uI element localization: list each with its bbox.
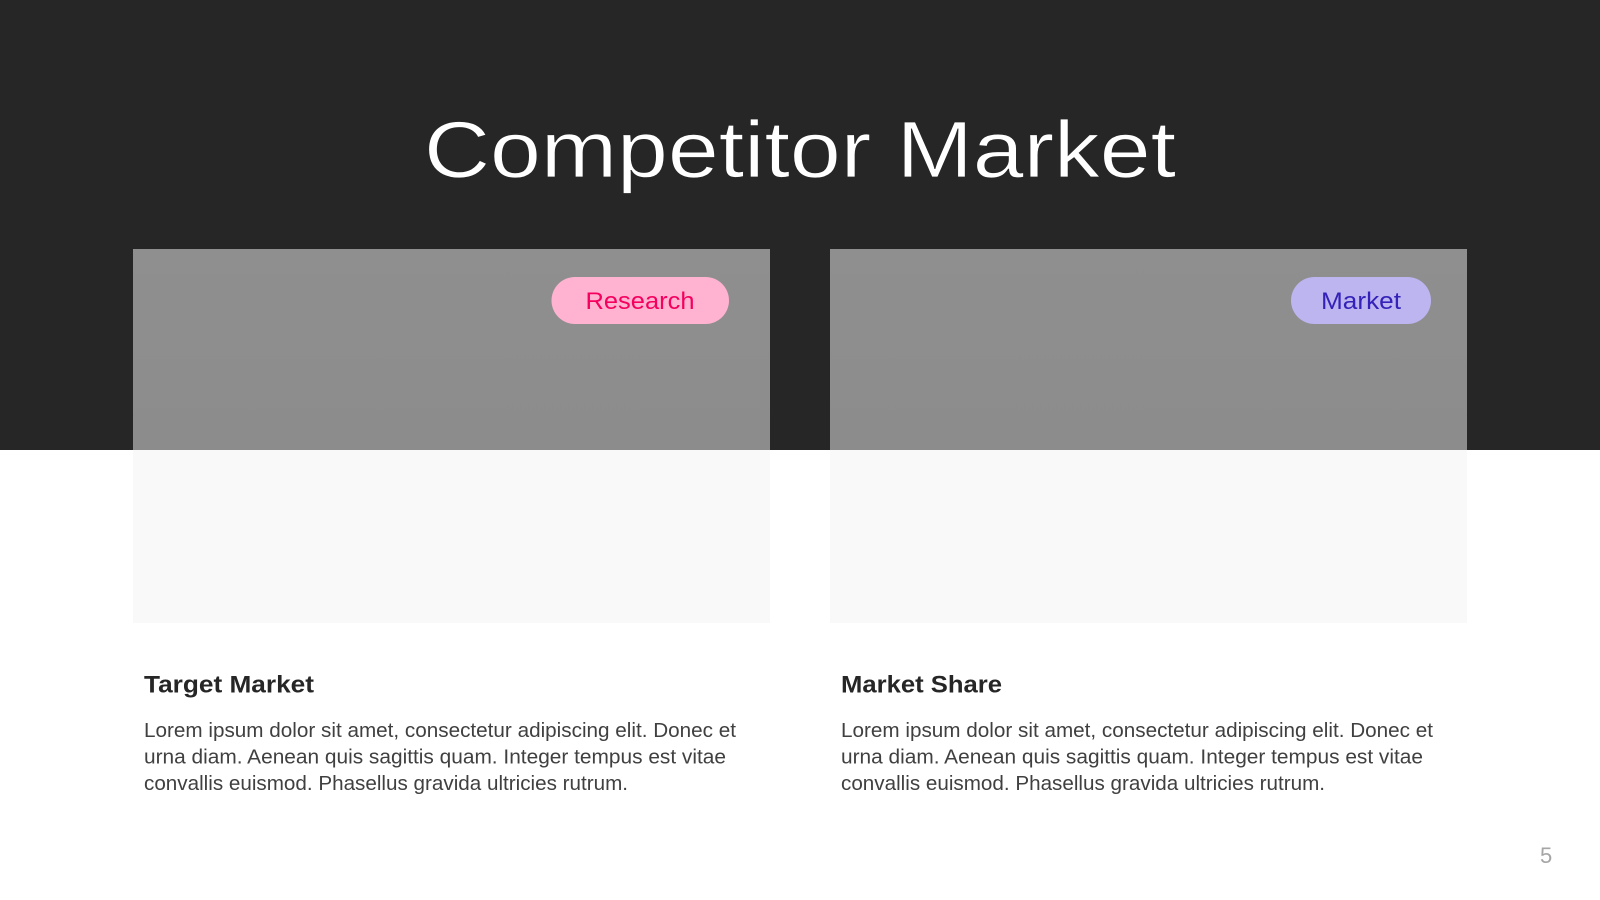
page number: 5 (1540, 843, 1552, 868)
tag: Research: Research (586, 288, 694, 315)
tag: Market: Market (1321, 288, 1401, 315)
heading: Target Market: Target Market (144, 672, 314, 698)
dark header band (0, 0, 1600, 450)
body: Target Market: urna diam. Aenean quis sagittis quam. Integer tempus est vitae (144, 746, 726, 768)
body: Market Share (841, 719, 1433, 795)
tag: Market (1291, 277, 1431, 324)
tag: Research (552, 277, 729, 324)
text block: Market Share (841, 672, 1433, 795)
body: Target Market (144, 719, 736, 795)
heading: Market Share: Market Share (841, 672, 1002, 698)
panel: research image (133, 249, 770, 623)
body: Target Market: convallis euismod. Phasellus gravida ultricies rutrum. (144, 772, 628, 795)
body: Target Market: Lorem ipsum dolor sit amet, consectetur adipiscing elit. Donec et (144, 719, 736, 742)
title: Competitor Market (424, 105, 1176, 194)
body: Market Share: urna diam. Aenean quis sagittis quam. Integer tempus est vitae (841, 746, 1423, 768)
text block: Target Market (144, 672, 736, 795)
body: Market Share: Lorem ipsum dolor sit amet, consectetur adipiscing elit. Donec et (841, 719, 1433, 742)
panel: market image (830, 249, 1467, 623)
body: Market Share: convallis euismod. Phasellus gravida ultricies rutrum. (841, 772, 1325, 795)
